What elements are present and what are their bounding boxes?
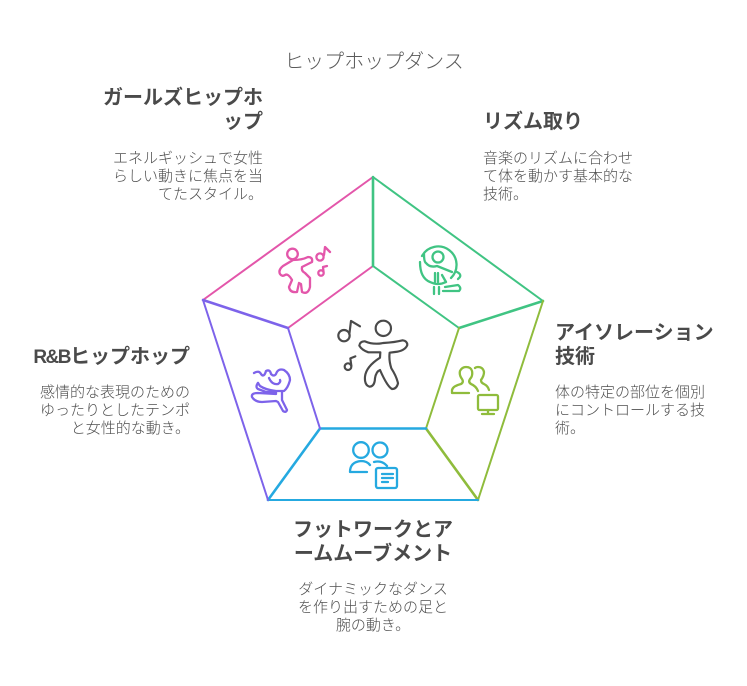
- body: rhythm: 音楽のリズムに合わせ: [483, 147, 633, 168]
- icon: people with monitor (olive): [452, 367, 498, 414]
- heading: footwork: フットワークとア: [293, 513, 453, 542]
- body: isolation: [555, 381, 705, 438]
- text block: girls hip hop: [103, 81, 263, 204]
- segment: girls (pink): [203, 177, 373, 328]
- heading: R&B hip hop: R&Bヒップホップ: [33, 340, 190, 369]
- icon: people with document (blue): [350, 442, 397, 488]
- text block: rhythm: [483, 105, 633, 204]
- body: girls hip hop: てたスタイル。: [158, 183, 263, 204]
- segment: R&B (purple): [203, 300, 320, 500]
- title: ヒップホップダンス: [284, 45, 464, 74]
- heading: footwork: ームムーブメント: [294, 537, 452, 566]
- body: R&B hip hop: [40, 381, 190, 438]
- heading: girls hip hop: ガールズヒップホ: [103, 81, 263, 110]
- body: isolation: 術。: [555, 417, 585, 438]
- text block: isolation: [555, 316, 714, 438]
- body: R&B hip hop: と女性的な動き。: [71, 417, 190, 438]
- icon: central dancer: [338, 321, 407, 389]
- heading: girls hip hop: ップ: [223, 105, 263, 134]
- body: footwork: を作り出すための足と: [298, 596, 448, 617]
- body: girls hip hop: らしい動きに焦点を当: [113, 165, 263, 186]
- heading: footwork: [293, 513, 453, 566]
- segment: rhythm (green): [373, 177, 543, 328]
- body: rhythm: [483, 147, 633, 204]
- text block: footwork: [293, 513, 453, 635]
- body: girls hip hop: [113, 147, 263, 204]
- text block: R&B hip hop: [33, 340, 190, 438]
- body: R&B hip hop: 感情的な表現のための: [40, 381, 190, 402]
- body: rhythm: て体を動かす基本的な: [483, 165, 633, 186]
- body: isolation: にコントロールする技: [555, 399, 705, 420]
- body: isolation: 体の特定の部位を個別: [555, 381, 705, 402]
- segment: footwork (blue): [268, 428, 478, 500]
- body: R&B hip hop: ゆったりとしたテンポ: [40, 399, 190, 420]
- icon: girl dancer (pink): [279, 247, 330, 293]
- heading: isolation: 技術: [555, 340, 595, 369]
- body: footwork: [298, 578, 448, 635]
- heading: isolation: [555, 316, 714, 369]
- heading: isolation: アイソレーション: [555, 316, 714, 345]
- body: rhythm: 技術。: [483, 183, 528, 204]
- segment: isolation (olive): [426, 301, 543, 500]
- body: footwork: 腕の動き。: [336, 614, 410, 635]
- icon: R&B dancer (purple): [252, 370, 290, 412]
- icon: rhythm dancer (green): [420, 246, 460, 294]
- body: footwork: ダイナミックなダンス: [298, 578, 448, 599]
- heading: rhythm: リズム取り: [483, 105, 583, 134]
- heading: girls hip hop: [103, 81, 263, 134]
- body: girls hip hop: エネルギッシュで女性: [113, 147, 263, 168]
